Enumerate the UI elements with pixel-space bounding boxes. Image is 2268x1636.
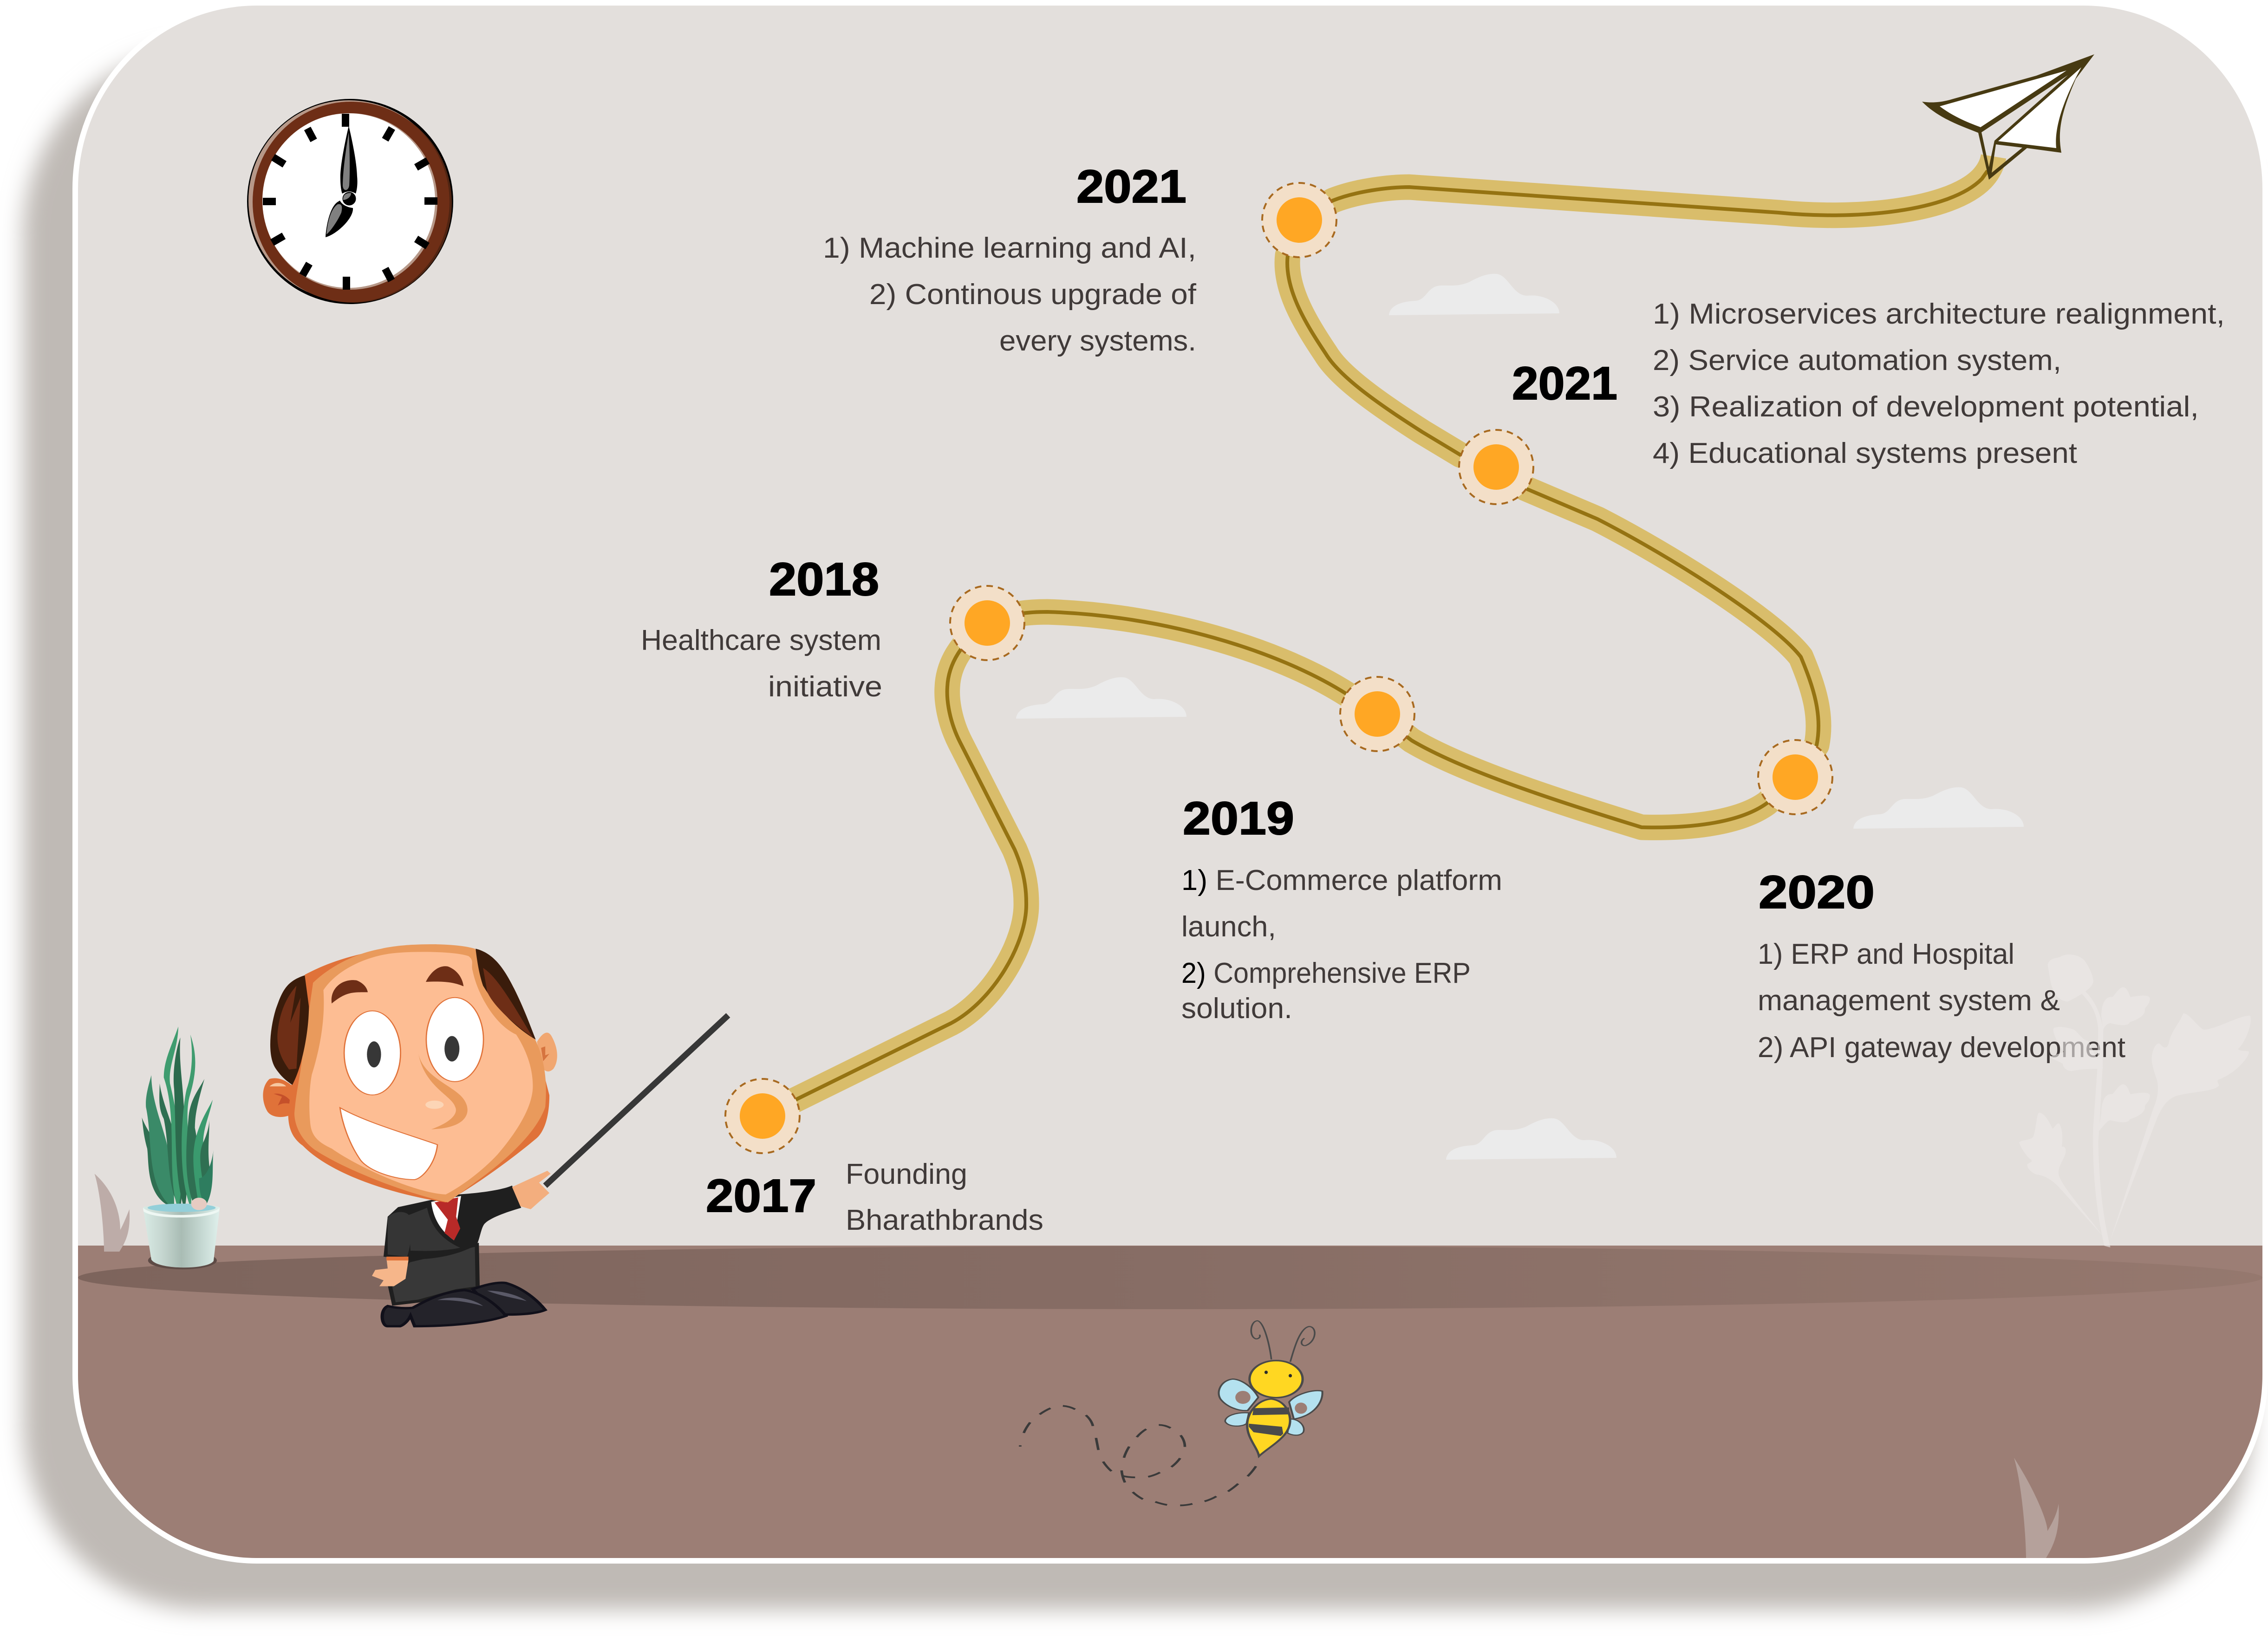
text block: 2020: 2) API gateway development <box>1758 1032 2125 1064</box>
text block: 2020 <box>1758 938 2125 1064</box>
ground band <box>78 1246 2262 1561</box>
year: 2018: 2018 <box>769 553 879 605</box>
text block: 2017 <box>846 1158 1043 1236</box>
text block: 2017: Founding <box>846 1158 967 1190</box>
text block: 2019 <box>1181 864 1502 1025</box>
faded grass left <box>95 1174 130 1252</box>
faded grass bottom right <box>2014 1458 2059 1558</box>
text block: 2019: solution. <box>1181 993 1292 1025</box>
year: 2017: 2017 <box>706 1170 816 1222</box>
winding timeline road <box>763 156 1994 1116</box>
milestone dot 2018 <box>950 586 1024 660</box>
text block: 2021 lower items: 2) Service automation system, <box>1653 344 2061 377</box>
faded leaf plant <box>2019 954 2251 1247</box>
milestone dot 2021 lower <box>1459 430 1533 504</box>
milestone dot 2019 <box>1340 677 1414 751</box>
smile <box>340 1108 437 1180</box>
milestone dot 2017 <box>725 1079 800 1153</box>
year: 2019: 2019 <box>1183 792 1294 844</box>
eyes <box>344 1011 401 1095</box>
text block: 2020: management system & <box>1758 985 2060 1017</box>
head <box>288 944 549 1202</box>
text block: 2021 lower items <box>1653 298 2225 469</box>
potted plant <box>142 1026 220 1269</box>
text block: 2019: launch, <box>1181 911 1276 943</box>
text block: 2019: 1) E-Commerce platform <box>1181 864 1502 896</box>
text block: 2021 lower items: 3) Realization of development potential, <box>1653 391 2199 423</box>
text block: 2021 upper items: 2) Continous upgrade of <box>869 279 1197 311</box>
icon: bee with dashed flight path <box>1020 1321 1323 1506</box>
text block: 2021 upper items: 1) Machine learning and AI, <box>823 232 1196 264</box>
text block: 2021 lower items: 1) Microservices architecture realignment, <box>1653 298 2225 330</box>
text block: 2021 upper items <box>823 232 1197 357</box>
text block: 2019: 2) Comprehensive ERP <box>1181 957 1471 989</box>
flight path <box>1020 1406 1256 1506</box>
cloud one <box>1016 677 1186 719</box>
text block: 2020: 1) ERP and Hospital <box>1758 938 2014 970</box>
text block: 2018: initiative <box>768 671 882 703</box>
cloud four <box>1446 1118 1616 1160</box>
hair <box>270 975 309 1085</box>
milestone dot 2020 <box>1758 740 1832 814</box>
left ear <box>263 1078 296 1117</box>
milestone dot 2021 upper <box>1262 183 1336 257</box>
year: 2021 upper: 2021 <box>1076 161 1186 213</box>
text block: 2017: Bharathbrands <box>846 1204 1043 1236</box>
text block: 2018: Healthcare system <box>641 624 881 656</box>
text block: 2018 <box>641 624 882 703</box>
nose <box>418 1051 468 1130</box>
year: 2020: 2020 <box>1759 866 1875 918</box>
icon: paper plane <box>1922 54 2094 180</box>
cloud three <box>1853 787 2024 829</box>
text block: 2021 lower items: 4) Educational systems present <box>1653 437 2077 469</box>
text block: 2021 upper items: every systems. <box>999 325 1196 357</box>
character: presenter with pointer <box>263 944 728 1326</box>
icon: wall clock <box>247 99 453 304</box>
right ear <box>537 1032 557 1071</box>
eyebrows <box>332 980 368 1003</box>
man figure <box>263 944 557 1326</box>
cloud two <box>1389 274 1559 315</box>
year: 2021 lower: 2021 <box>1512 357 1617 409</box>
pointer stick <box>545 1015 728 1186</box>
